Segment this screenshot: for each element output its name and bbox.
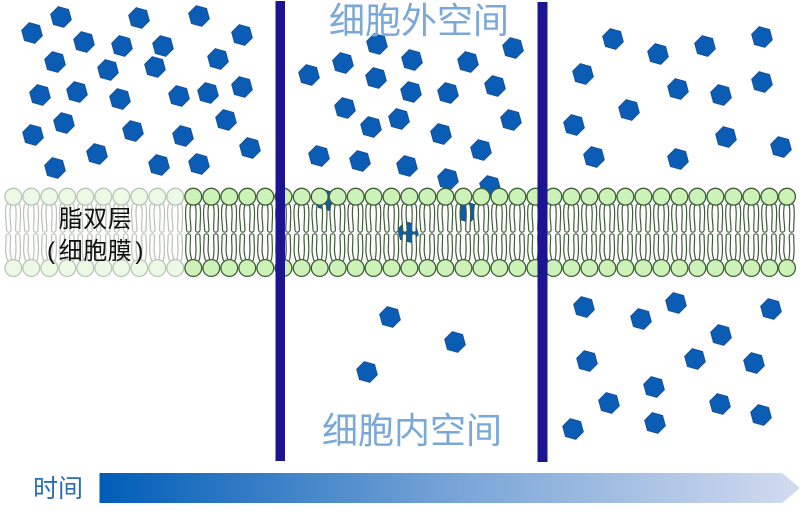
label: lipid bilayer (cell membrane): (细胞膜) bbox=[47, 238, 144, 265]
lipid bilayer: cell membrane bbox=[185, 188, 795, 276]
lipid bilayer: faded section behind label bbox=[5, 188, 184, 276]
arrow: time gradient bbox=[100, 473, 800, 503]
label: time: 时间 bbox=[33, 475, 83, 503]
label: lipid bilayer (cell membrane) bbox=[47, 206, 144, 265]
heading: intracellular space: 细胞内空间 bbox=[322, 410, 502, 451]
molecules: middle panel, extracellular and crossing membrane bbox=[299, 34, 523, 242]
label: lipid bilayer (cell membrane): 脂双层 bbox=[59, 206, 132, 233]
divider bar: left bbox=[276, 1, 285, 461]
heading: extracellular space: 细胞外空间 bbox=[329, 0, 509, 41]
molecules: left panel, extracellular bbox=[22, 6, 260, 178]
molecules: right panel, extracellular bbox=[564, 27, 791, 169]
molecules: right panel, intracellular bbox=[563, 293, 781, 439]
divider bar: right bbox=[538, 2, 548, 462]
molecules: middle panel, intracellular bbox=[357, 307, 465, 382]
